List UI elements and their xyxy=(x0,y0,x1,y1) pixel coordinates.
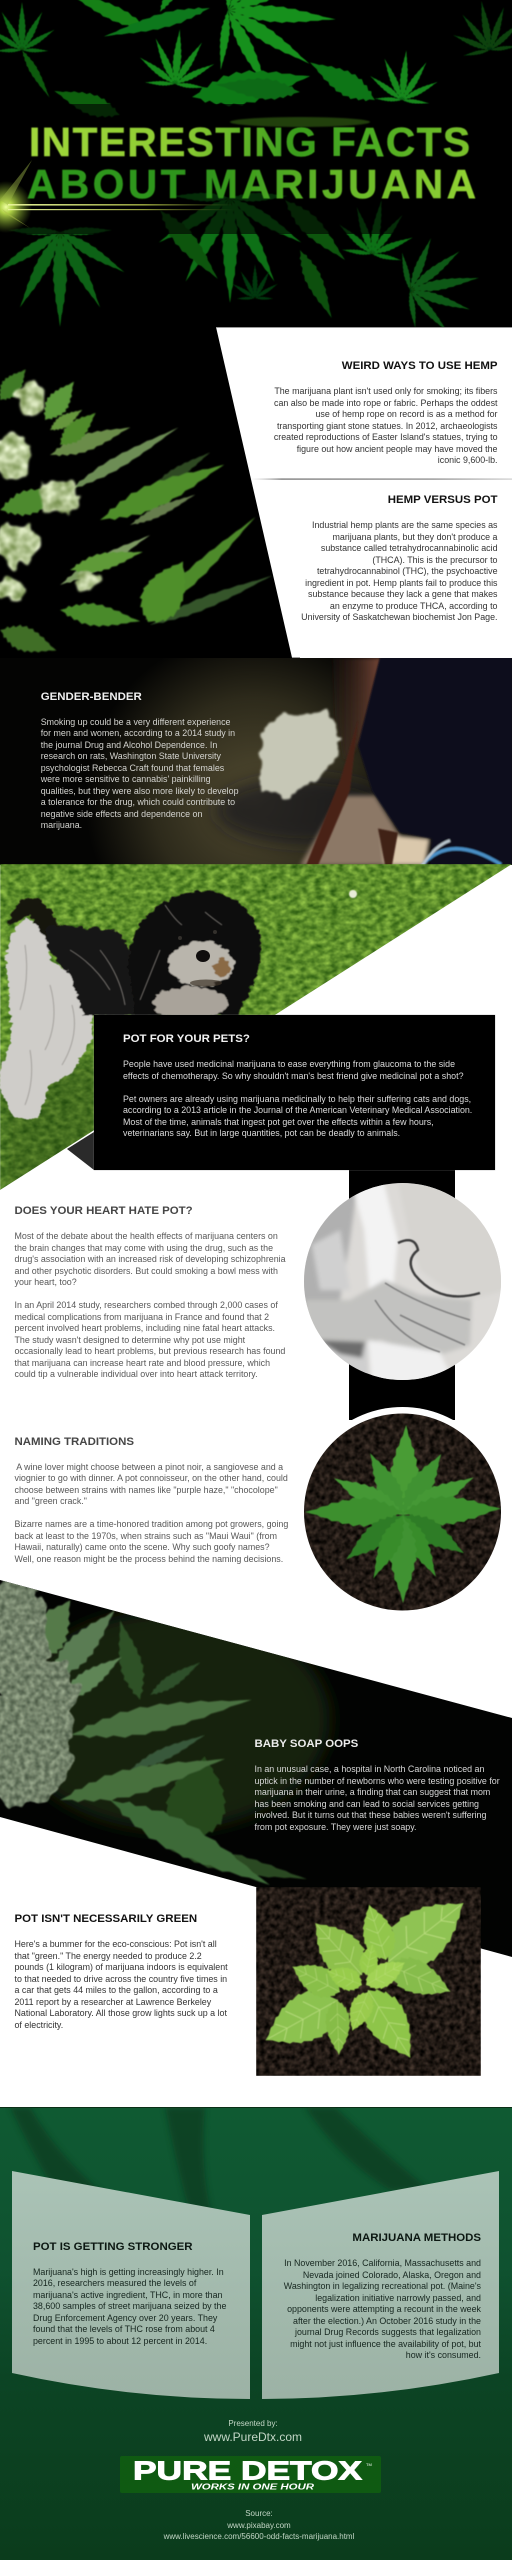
body text: transporting giant stone statues. In 2012, archaeologists xyxy=(277,420,498,430)
body text: your heart, too? xyxy=(14,1277,77,1287)
body text xyxy=(40,717,239,830)
body text: qualities, but they were also more likely to develop xyxy=(41,786,239,796)
body text: back at least to the 1970s, when strains such as "Maui Waui" (from xyxy=(14,1530,277,1540)
body text: Most of the debate about the health effects of marijuana centers on xyxy=(14,1231,278,1241)
body text xyxy=(14,1939,228,2030)
body text: pounds (1 kilogram) of marijuana indoors is equivalent xyxy=(14,1962,228,1972)
body text: negative side effects and dependence on xyxy=(41,809,202,819)
body text: 38,600 samples of street marijuana seized by the xyxy=(33,2301,226,2311)
body text: has been smoking and can lead to social services getting xyxy=(254,1798,479,1808)
body text xyxy=(254,1764,500,1832)
heading: WEIRD WAYS TO USE HEMP xyxy=(342,360,498,372)
body text: People have used medicinal marijuana to ease everything from glaucoma to the side xyxy=(123,1059,455,1069)
body text: percent in 1995 to about 12 percent in 2014. xyxy=(33,2336,207,2346)
body text: involved. But it turns out that these babies weren't suffering xyxy=(254,1810,486,1820)
body text: University of Saskatchewan biochemist Jon Page. xyxy=(301,612,498,622)
body text: tetrahydrocannabinol (THC), the psychoactive xyxy=(317,566,498,576)
body text: occasionally lead to heart problems, but previous research has found xyxy=(14,1346,285,1356)
photo: cannabis bud on black xyxy=(0,340,300,658)
logo: pure detox: PURE DETOX xyxy=(133,2458,362,2486)
body text: Most of the time, animals that ingest pot get over the effects within a few hours, xyxy=(123,1116,434,1126)
panel: black box xyxy=(94,1015,495,1170)
body text: a tolerance for the drug, which could contribute to xyxy=(41,797,235,807)
body text: and other psychotic disorders. But could smoking a bowl mess with xyxy=(14,1266,278,1276)
text block: does your heart hate pot xyxy=(14,1205,286,1379)
title: ABOUT MARIJUANA xyxy=(27,161,476,207)
logo: pure detox: WORKS IN ONE HOUR xyxy=(191,2482,315,2492)
body text: and "green crack." xyxy=(14,1496,87,1506)
body text: The study wasn't designed to determine why pot use might xyxy=(14,1335,245,1345)
body text: an enzyme to produce THCA, according to xyxy=(330,601,498,611)
title xyxy=(27,119,476,207)
body text: Pet owners are already using marijuana medicinally to help their suffering cats and dogs, xyxy=(123,1094,471,1104)
text block: hemp versus pot xyxy=(301,494,498,622)
body text: psychologist Rebecca Craft found that females xyxy=(41,763,224,773)
body text: found that the levels of THC rose from about 4 xyxy=(33,2324,215,2334)
body text xyxy=(301,520,498,622)
title: INTERESTING FACTS xyxy=(29,119,470,165)
body text: for men and women, according to a 2014 study in xyxy=(41,728,235,738)
panel: pot for your pets backdrop xyxy=(67,1132,455,1420)
body text: marijuana in their urine, a finding that can suggest that mom xyxy=(254,1787,490,1797)
presented by: Presented by: xyxy=(228,2419,278,2428)
body text: the brain changes that may come with using the drug, such as the xyxy=(14,1243,273,1253)
body text: Hawaii, naturally) came onto the scene. Why such goofy names? xyxy=(14,1542,270,1552)
website: www.PureDtx.com xyxy=(204,2430,302,2444)
body text: legalization initiative narrowly passed, and xyxy=(315,2292,481,2302)
body text: created reproductions of Easter Island's statues, trying to xyxy=(274,432,498,442)
body text: to that needed to drive across the country five times in xyxy=(14,1974,227,1984)
logo: pure detox: TM xyxy=(366,2462,372,2467)
body text: medical complications from marijuana in France and found that 2 xyxy=(14,1312,269,1322)
body text: A wine lover might choose between a pinot noir, a sangiovese and a xyxy=(16,1462,283,1472)
body text: Washington in legalizing recreational pot. (Maine's xyxy=(284,2281,481,2291)
photo: woman exhaling smoke xyxy=(0,658,512,865)
body text: marijuana's active ingredient, THC, in more than xyxy=(33,2290,222,2300)
body text: substance called tetrahydrocannabinolic acid xyxy=(321,543,498,553)
body text: In November 2016, California, Massachusetts and xyxy=(284,2258,481,2268)
body text xyxy=(33,2267,226,2346)
body text: marijuana. xyxy=(41,820,82,830)
body text: National Laboratory. All those grow lights suck up a lot xyxy=(14,2008,227,2018)
body text: could tip a vulnerable individual over into heart attack territory. xyxy=(14,1369,258,1379)
text block: pot for your pets xyxy=(123,1033,472,1138)
panel: white text panel xyxy=(216,327,512,658)
body text: iconic 9,600-lb. xyxy=(438,455,498,465)
body text: Smoking up could be a very different experience xyxy=(41,717,230,727)
panel: left text card xyxy=(12,2171,250,2399)
body text: use of hemp rope on record is as a method for xyxy=(315,409,498,419)
source credits: www.pixabay.com xyxy=(227,2520,291,2530)
body text: might not just influence the availability of pot, but xyxy=(290,2338,481,2348)
body text: choose between strains with names like "purple haze," "chocolope" xyxy=(14,1484,278,1494)
body text: ingredient in pot. Hemp plants fail to produce this xyxy=(305,578,498,588)
body text: that "green." The energy needed to produce 2.2 xyxy=(14,1950,202,1960)
photo: baby soap cannabis band xyxy=(0,1580,512,1957)
body text xyxy=(14,1231,286,1379)
body text: research on rats, Washington State University xyxy=(41,751,221,761)
body text: Drug Enforcement Agency over 20 years. They xyxy=(33,2313,217,2323)
body text: from pot exposure. They were just soapy. xyxy=(254,1822,416,1832)
panel: header with marijuana leaves xyxy=(0,0,512,327)
heading: GENDER-BENDER xyxy=(41,691,142,703)
body text: the journal Drug and Alcohol Dependence. In xyxy=(41,740,217,750)
body text: Here's a bummer for the eco-conscious: Pot isn't all xyxy=(14,1939,217,1949)
body text: after the election.) An October 2016 study in the xyxy=(293,2316,481,2326)
body text: The marijuana plant isn't used only for smoking; its fibers xyxy=(274,386,498,396)
heading: DOES YOUR HEART HATE POT? xyxy=(14,1205,193,1217)
body text: figure out how ancient people may have moved the xyxy=(297,444,498,454)
body text: percent involved heart problems, including nine fatal heart attacks. xyxy=(14,1323,275,1333)
body text: opponents were attempting a recount in the week xyxy=(287,2304,481,2314)
body text: Bizarre names are a time-honored tradition among pot growers, going xyxy=(14,1519,288,1529)
source credits: Source: xyxy=(245,2509,273,2518)
body text: substance because they lack a gene that makes xyxy=(308,589,498,599)
body text: In an April 2014 study, researchers combed through 2,000 cases of xyxy=(14,1300,278,1310)
body text: (THCA). This is the precursor to xyxy=(372,555,498,565)
body text: 2011 report by a researcher at Lawrence Berkeley xyxy=(14,1996,211,2006)
body text: Nevada joined Colorado, Alaska, Oregon and xyxy=(303,2270,481,2280)
body text: were more sensitive to cannabis' painkilling xyxy=(41,774,211,784)
heading: HEMP VERSUS POT xyxy=(388,494,498,506)
text block: gender-bender xyxy=(40,691,239,830)
heading: POT IS GETTING STRONGER xyxy=(33,2241,192,2253)
text block: marijuana methods xyxy=(284,2232,481,2360)
body text: journal Drug Records suggests that legalization xyxy=(295,2327,481,2337)
body text: according to a 2013 article in the Journal of the American Veterinary Medical Association. xyxy=(123,1105,472,1115)
photo: circle hand on chest xyxy=(304,1183,501,1380)
body text: effects of chemotherapy. So why shouldn't man's best friend give medicinal pot a shot? xyxy=(123,1070,464,1080)
body text: drug's association with an increased risk of developing schizophrenia xyxy=(14,1254,286,1264)
logo: pure detox xyxy=(120,2456,381,2493)
body text xyxy=(284,2258,481,2360)
body text: marijuana plants, but they don't produce a xyxy=(332,532,498,542)
panel: bottom green section xyxy=(0,2107,512,2560)
body text: of electricity. xyxy=(14,2020,63,2030)
body text xyxy=(14,1462,288,1564)
heading: POT ISN'T NECESSARILY GREEN xyxy=(14,1913,197,1925)
text block: weird ways to use hemp xyxy=(274,360,498,465)
heading: POT FOR YOUR PETS? xyxy=(123,1033,250,1045)
body text: Marijuana's high is getting increasingly higher. In xyxy=(33,2267,224,2277)
text block: pot is getting stronger xyxy=(33,2241,226,2346)
heading: MARIJUANA METHODS xyxy=(352,2232,481,2244)
body text: that marijuana can increase heart rate and blood pressure, which xyxy=(14,1358,270,1368)
source credits: www.livescience.com/56600-odd-facts-marijuana.html xyxy=(164,2532,354,2541)
photo: seedling in soil xyxy=(256,1887,481,2076)
photo: circle young plant in soil xyxy=(304,1407,501,1610)
heading: NAMING TRADITIONS xyxy=(14,1436,134,1448)
body text xyxy=(274,386,498,465)
panel: right text card xyxy=(262,2171,499,2399)
body text: viognier to go with dinner. A pot connoisseur, on the other hand, could xyxy=(14,1473,288,1483)
body text: 2016, researchers measured the levels of xyxy=(33,2278,196,2288)
heading: BABY SOAP OOPS xyxy=(254,1738,358,1750)
body text: how it's consumed. xyxy=(406,2350,481,2360)
body text: veterinarians say. But in large quantities, pot can be deadly to animals. xyxy=(123,1128,400,1138)
body text: In an unusual case, a hospital in North Carolina noticed an xyxy=(254,1764,484,1774)
text block: naming traditions xyxy=(14,1436,288,1564)
body text: can also be made into rope or fabric. Perhaps the oddest xyxy=(274,398,498,408)
body text xyxy=(123,1059,472,1138)
body text: a car that gets 44 miles to the gallon, according to a xyxy=(14,1985,218,1995)
text block: baby soap oops xyxy=(254,1738,500,1832)
source credits xyxy=(164,2509,354,2541)
photo: dog on grass xyxy=(0,864,512,1190)
text block: pot isn't necessarily green xyxy=(14,1913,228,2030)
body text: Industrial hemp plants are the same species as xyxy=(312,520,498,530)
body text: Well, one reason might be the process behind the naming decisions. xyxy=(14,1554,283,1564)
body text: uptick in the number of newborns who were testing positive for xyxy=(254,1776,500,1786)
